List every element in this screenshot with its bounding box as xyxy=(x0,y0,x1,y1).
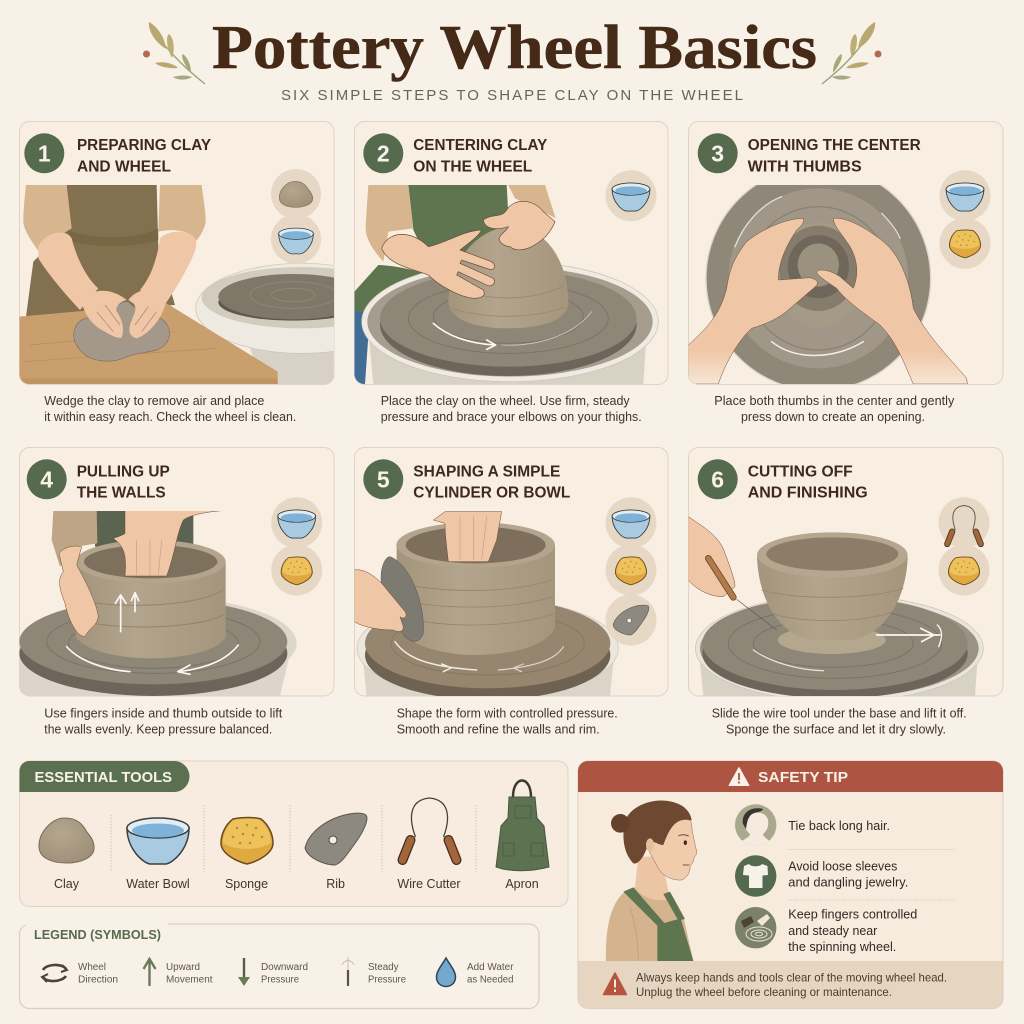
label: steady: Pressure xyxy=(368,975,406,986)
safety header xyxy=(578,761,1003,792)
materials icons 1 xyxy=(271,169,321,264)
icon: right sprig xyxy=(822,22,882,84)
materials icons 6 xyxy=(938,497,990,596)
description 6 xyxy=(712,706,967,736)
illustration: woman profile xyxy=(606,801,697,963)
panel: legend xyxy=(20,924,539,1008)
label: upward: Movement xyxy=(166,975,213,986)
tool labels: Water Bowl xyxy=(126,877,190,891)
tool labels: Sponge xyxy=(225,877,268,891)
heading 5 xyxy=(413,464,571,502)
label: add water xyxy=(467,962,514,986)
label: add water: Add Water xyxy=(467,962,514,973)
step number 1: 1 xyxy=(38,140,51,166)
title: Pottery Wheel Basics xyxy=(212,14,817,82)
panel: step 4 xyxy=(19,448,334,736)
description 5: Shape the form with controlled pressure. xyxy=(397,706,618,720)
illustration: pulling up walls xyxy=(19,511,297,696)
icon: warning triangle xyxy=(604,973,626,994)
label: upward: Upward xyxy=(166,962,200,973)
text: sleeves: and dangling jewelry. xyxy=(788,876,908,890)
description 4 xyxy=(44,706,283,736)
tool: apron xyxy=(496,780,549,871)
text: fingers: the spinning wheel. xyxy=(788,940,896,954)
tool: sponge xyxy=(221,818,273,864)
tool labels: Apron xyxy=(505,877,539,891)
description 1: Wedge the clay to remove air and place xyxy=(44,394,264,408)
description 6: Sponge the surface and let it dry slowly. xyxy=(726,722,946,736)
tool: wire cutter xyxy=(402,798,456,860)
tool labels xyxy=(54,877,539,891)
tool labels: Rib xyxy=(326,877,345,891)
description 4: the walls evenly. Keep pressure balanced. xyxy=(44,722,272,736)
description 1: it within easy reach. Check the wheel is clean. xyxy=(44,410,296,424)
heading 2: ON THE WHEEL xyxy=(413,158,533,176)
tool: rib xyxy=(305,813,367,865)
description 3: Place both thumbs in the center and gently xyxy=(714,394,955,408)
heading 1: AND WHEEL xyxy=(77,158,171,176)
description 6: Slide the wire tool under the base and lift it off. xyxy=(712,706,967,720)
materials icons 3 xyxy=(940,170,990,269)
step number 2: 2 xyxy=(377,140,390,166)
heading 4: THE WALLS xyxy=(77,485,166,502)
heading 2: CENTERING CLAY xyxy=(413,137,548,154)
symbol: wheel direction xyxy=(42,965,67,982)
illustration: centering clay xyxy=(354,185,658,384)
label: add water: as Needed xyxy=(467,975,514,986)
label: wheel direction xyxy=(78,962,118,986)
label: wheel direction: Direction xyxy=(78,975,118,986)
tool labels: Clay xyxy=(54,877,80,891)
description 2: pressure and brace your elbows on your thighs. xyxy=(381,410,642,424)
step number 6: 6 xyxy=(711,466,724,492)
subtitle: SIX SIMPLE STEPS TO SHAPE CLAY ON THE WHEEL xyxy=(281,87,743,104)
label: steady: Steady xyxy=(368,962,398,973)
label: downward: Pressure xyxy=(261,975,299,986)
description 1 xyxy=(44,394,296,424)
panel: step 5 xyxy=(354,448,668,736)
label: steady xyxy=(368,962,406,986)
icon: avoid loose sleeves xyxy=(735,855,776,897)
label: upward xyxy=(166,962,213,986)
icon: controlled fingers xyxy=(735,907,776,948)
step number 5: 5 xyxy=(377,466,390,492)
symbol: downward pressure xyxy=(238,958,250,986)
step number 4 xyxy=(27,459,67,499)
step number 5 xyxy=(363,459,403,499)
panel: step 6 xyxy=(688,448,1003,736)
panel: essential tools xyxy=(20,761,568,906)
description 2 xyxy=(381,394,642,424)
illustration: cutting off bowl xyxy=(688,517,983,702)
heading 1: PREPARING CLAY xyxy=(77,137,211,154)
heading 3: WITH THUMBS xyxy=(748,158,862,176)
step number 3: 3 xyxy=(711,140,724,166)
panel: step 3 xyxy=(688,122,1003,424)
description 4: Use fingers inside and thumb outside to lift xyxy=(44,706,283,720)
heading 6: AND FINISHING xyxy=(748,485,868,502)
heading 4: PULLING UP xyxy=(77,464,170,481)
text: tie back: Tie back long hair. xyxy=(788,819,890,833)
panel: step 2 xyxy=(354,122,668,424)
illustration: wedging clay xyxy=(20,185,334,384)
label: downward: Downward xyxy=(261,962,308,973)
heading 5: CYLINDER OR BOWL xyxy=(413,485,571,502)
heading 3 xyxy=(748,137,921,176)
tools header tab xyxy=(20,761,190,792)
description 3: press down to create an opening. xyxy=(741,410,925,424)
footer warning text: Unplug the wheel before cleaning or maintenance. xyxy=(636,985,892,999)
text: fingers: Keep fingers controlled xyxy=(788,907,917,921)
illustration: shaping cylinder xyxy=(354,512,618,700)
heading 5: SHAPING A SIMPLE xyxy=(413,464,561,481)
illustration: opening with thumbs xyxy=(688,185,968,384)
heading 6: CUTTING OFF xyxy=(748,464,853,481)
text: sleeves xyxy=(788,860,908,890)
text: fingers: and steady near xyxy=(788,924,877,938)
description 2: Place the clay on the wheel. Use firm, steady xyxy=(381,394,630,408)
text: sleeves: Avoid loose sleeves xyxy=(788,860,897,874)
text: fingers xyxy=(788,907,917,954)
description 3 xyxy=(714,394,955,424)
tool labels: Wire Cutter xyxy=(397,877,461,891)
icon: left sprig xyxy=(143,22,205,84)
symbol: steady pressure xyxy=(342,957,354,986)
panel: step 1 xyxy=(19,121,334,424)
heading 4 xyxy=(77,464,170,502)
footer warning text: Always keep hands and tools clear of the moving wheel head. xyxy=(636,971,947,985)
step number 4: 4 xyxy=(40,466,53,492)
panel: safety tip xyxy=(578,761,1003,1008)
materials icon 2 xyxy=(606,170,656,221)
step number 1 xyxy=(24,133,64,173)
description 5 xyxy=(397,706,618,736)
step number 6 xyxy=(698,459,738,499)
materials icons 4 xyxy=(271,497,322,596)
description 5: Smooth and refine the walls and rim. xyxy=(397,722,600,736)
heading 1 xyxy=(77,137,211,176)
symbol: upward movement xyxy=(144,959,156,986)
tool: water bowl xyxy=(127,818,189,864)
heading 6 xyxy=(748,464,868,502)
symbol: water drop xyxy=(436,958,456,986)
heading 3: OPENING THE CENTER xyxy=(748,137,921,154)
legend heading: LEGEND (SYMBOLS) xyxy=(34,928,161,942)
tools header tab: ESSENTIAL TOOLS xyxy=(34,769,172,786)
heading 2 xyxy=(413,137,548,176)
footer warning text xyxy=(636,971,947,999)
label: downward xyxy=(261,962,308,986)
label: wheel direction: Wheel xyxy=(78,962,106,973)
step number 2 xyxy=(363,133,403,173)
safety header: SAFETY TIP xyxy=(758,769,848,786)
materials icons 5 xyxy=(606,497,656,646)
step number 3 xyxy=(698,133,738,173)
icon: tie back hair xyxy=(735,804,776,848)
safety footer xyxy=(578,961,1002,1008)
tool: clay xyxy=(39,818,94,863)
